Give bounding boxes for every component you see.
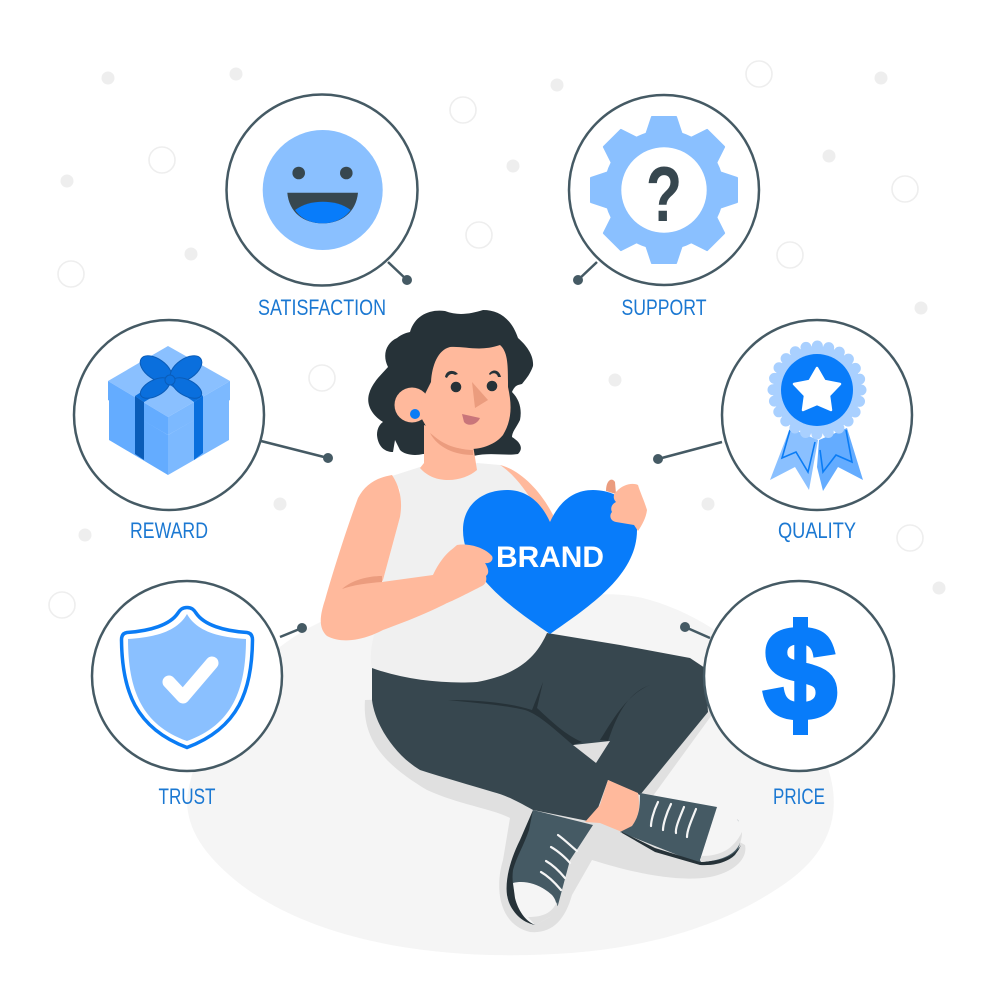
pants creases — [448, 682, 650, 745]
right laces — [651, 802, 696, 837]
top — [371, 463, 560, 682]
connector: reward — [261, 441, 332, 462]
hair — [368, 310, 533, 456]
left arm back — [500, 465, 553, 530]
left shoe sole — [507, 810, 535, 925]
mouth — [462, 414, 480, 425]
pants gap — [573, 741, 610, 763]
panel: satisfaction — [226, 94, 418, 320]
right hand on heart — [606, 480, 647, 531]
icon: shield — [122, 608, 252, 748]
icon: gift box — [108, 346, 230, 475]
right ankle — [585, 780, 639, 832]
woman — [321, 310, 742, 925]
icon: gear — [591, 117, 737, 263]
connector: support — [574, 262, 597, 284]
ear — [394, 388, 430, 422]
earring — [410, 409, 420, 419]
label: support: SUPPORT — [622, 295, 706, 320]
connector: price — [680, 622, 710, 638]
connector: trust — [280, 624, 306, 637]
icon: gear: ? — [646, 150, 682, 238]
face — [418, 345, 511, 449]
panel: reward — [74, 320, 264, 543]
panel: price — [704, 581, 894, 809]
left toe — [513, 882, 556, 925]
connector: satisfaction — [388, 262, 412, 284]
pants — [372, 633, 708, 822]
icon: smiley — [263, 130, 383, 250]
right shoe sole — [622, 832, 741, 865]
panel: support — [569, 95, 759, 320]
label: quality: QUALITY — [778, 518, 856, 543]
nose — [472, 382, 488, 408]
panel: quality — [722, 320, 912, 543]
right toe — [700, 807, 742, 862]
arm — [321, 475, 492, 640]
icon: dollar sign: $ — [763, 600, 837, 747]
panel: trust — [92, 581, 282, 809]
left hand on heart — [425, 545, 493, 603]
figure shadow — [365, 690, 745, 932]
left toe shade — [528, 902, 557, 925]
connector: quality — [654, 442, 722, 464]
right shoe — [620, 793, 741, 864]
neck shadow — [430, 433, 473, 455]
background dots and rings — [49, 61, 946, 618]
label: reward: REWARD — [130, 518, 208, 543]
neck — [420, 425, 477, 480]
eyes — [445, 371, 501, 392]
left laces — [541, 835, 577, 890]
left shoe — [507, 810, 593, 925]
heart label: BRAND — [496, 541, 604, 574]
elbow crease — [342, 576, 382, 589]
label: trust: TRUST — [158, 784, 216, 809]
heart — [463, 490, 637, 634]
right toe shade — [701, 832, 742, 862]
icon: ribbon badge — [770, 346, 863, 491]
label: price: PRICE — [773, 784, 825, 809]
label: satisfaction: SATISFACTION — [258, 295, 386, 320]
ground blob — [187, 594, 834, 955]
